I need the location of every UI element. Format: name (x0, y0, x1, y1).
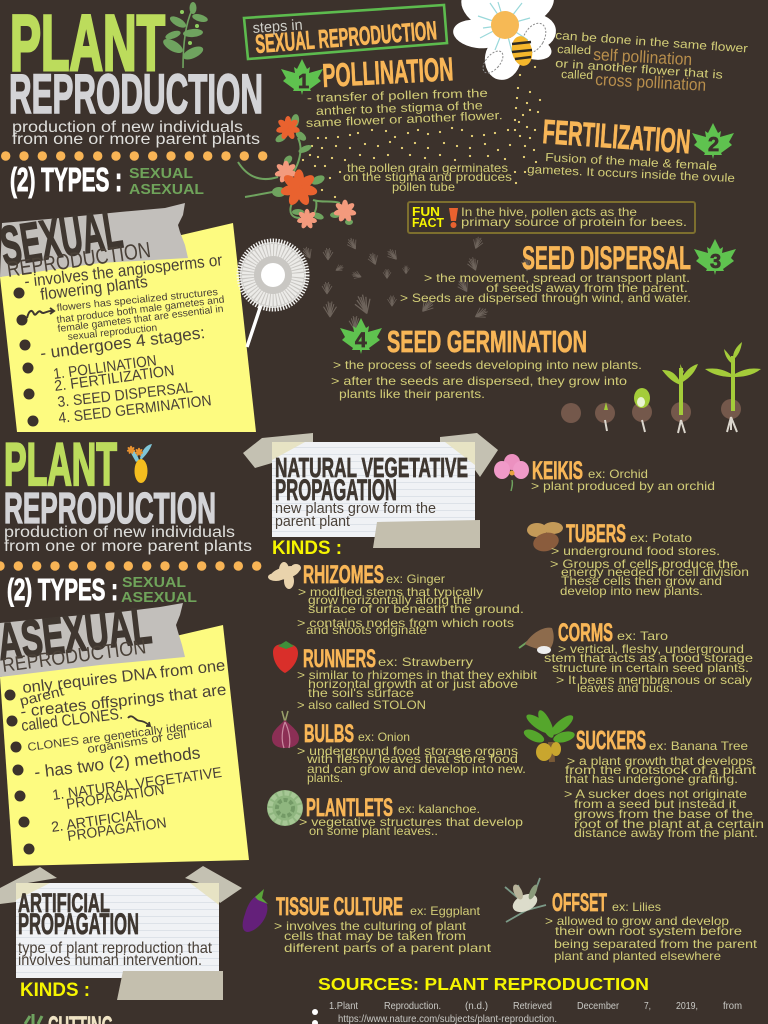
item: corms: CORMS (558, 619, 613, 647)
subtitle: definition: production of new individuals (12, 119, 243, 136)
icon: lemon with flowers (127, 444, 152, 483)
item: offset: ex: Lilies (612, 900, 661, 914)
note text: 3. SEED DISPERSAL (57, 379, 194, 411)
step 3: seed dispersal: > Seeds are dispersed through wind, and water. (400, 291, 691, 305)
item: corms: leaves and buds. (577, 681, 673, 695)
item: offset: > allowed to grow and develop (545, 914, 729, 928)
item: offset: plant and planted elsewhere (554, 949, 721, 963)
note text: CLONES are genetically identical (27, 718, 213, 754)
text: source citation (312, 1001, 742, 1024)
callout: fun fact: primary source of protein for bees. (461, 215, 687, 229)
note text (18, 657, 227, 845)
icon: onion (272, 711, 299, 748)
title: plant reproduction: REPRODUCTION (9, 62, 263, 125)
step 2: fertilization: gametes. It occurs inside the ovule (527, 162, 736, 185)
torn tape heading (0, 197, 188, 282)
step 1: pollination (281, 50, 503, 130)
note text: flowering plants (39, 273, 149, 304)
pollen trail (303, 67, 540, 197)
item: rhizomes: RHIZOMES (303, 561, 384, 589)
text: pollen tube (343, 161, 512, 194)
icon: daisy with bee (451, 0, 561, 83)
heading: sources: SOURCES: PLANT REPRODUCTION (318, 974, 649, 994)
icon: banana palm (522, 708, 576, 762)
icon: potatoes (527, 522, 563, 554)
item: runners: the soil's surface (308, 686, 415, 700)
item: rhizomes: surface of or beneath the ground. (308, 602, 524, 616)
item: tubers: These cells then grow and (561, 574, 722, 588)
icon: orchid (494, 454, 529, 491)
step 4: seed germination: plants like their parents. (339, 387, 485, 401)
dotted divider second (0, 561, 261, 571)
note holes (14, 288, 38, 426)
dotted divider top (1, 151, 267, 161)
item: tubers: develop into new plants. (560, 584, 703, 598)
item: tubers: TUBERS (566, 520, 626, 548)
item: corms: structure in certain seed plants. (552, 661, 749, 675)
text: source citation: (n.d.) (465, 1001, 488, 1012)
item: corms: > It bears membranous or scaly (556, 673, 752, 687)
item: bulbs: and can grow and develop into new. (307, 762, 526, 776)
item: suckers: > a plant growth that develops (567, 754, 753, 768)
icon: flower vine (238, 113, 357, 229)
item: rhizomes: grow horizontally along the (308, 593, 473, 607)
icon: ginger (268, 562, 301, 589)
card: artificial propagation: type of plant reproduction that (18, 940, 213, 957)
item: tubers: > Groups of cells produce the (550, 557, 739, 571)
text: source citation: December (577, 1001, 620, 1012)
text: self and cross pollination (555, 28, 748, 95)
step 4: seed germination: > after the seeds are dispersed, they grow into (331, 374, 628, 388)
heading: two types: SEXUAL (129, 165, 193, 182)
step 4: seed germination: SEED GERMINATION (387, 324, 587, 359)
subtitle: second definition: from one or more parent plants (4, 538, 252, 555)
title: second plant reproduction: REPRODUCTION (4, 484, 216, 533)
item: bulbs (272, 711, 526, 785)
text: self and cross pollination: self pollination (593, 45, 693, 69)
item: suckers: ex: Banana Tree (649, 739, 748, 753)
step 4: seed germination: > the process of seeds developing into new plants. (333, 358, 642, 372)
item: offset: OFFSET (552, 889, 607, 917)
text: source citation: Retrieved (513, 1001, 552, 1012)
icon: eggplant (243, 889, 268, 932)
item: runners (273, 641, 538, 712)
item: suckers: distance away from the plant. (574, 826, 758, 840)
item: runners: RUNNERS (303, 645, 376, 673)
item: plantlets: on some plant leaves.. (309, 824, 438, 838)
item: tubers: ex: Potato (630, 531, 693, 545)
note text: called CLONES. (20, 706, 124, 735)
text: pollen tube: on the stigma and produces (343, 170, 512, 184)
item: keikis: > plant produced by an orchid (531, 479, 715, 493)
subtitle: second definition: production of new individuals (4, 524, 235, 541)
text: source citation: from (723, 1001, 742, 1012)
note text: PROPAGATION (65, 782, 165, 813)
card: artificial propagation: ARTIFICIAL (18, 888, 110, 918)
panel: asexual reproduction note (0, 597, 249, 866)
text: self and cross pollination: can be done in the same flower (555, 28, 748, 55)
item: corms: stem that acts as a food storage (544, 651, 754, 665)
title: plant reproduction (9, 0, 263, 125)
icon: leaf 2: 2 (708, 134, 719, 156)
item: plantlets: ex: kalanchoe. (398, 802, 480, 816)
note text: - involves the angiosperms or (23, 251, 224, 291)
item: keikis (494, 454, 715, 493)
icon: leaf 4: 4 (355, 329, 367, 352)
item: tissue culture: cells that may be taken from (284, 929, 466, 943)
card: natural vegetative propagation: NATURAL VEGETATIVE (275, 452, 468, 483)
torn tape heading (0, 597, 185, 677)
note text: - has two (2) methods (33, 743, 201, 782)
subtitle: definition: from one or more parent plants (12, 131, 260, 148)
item: suckers: that has undergone grafting. (565, 772, 738, 786)
step 1: pollination: POLLINATION (321, 50, 454, 94)
item: suckers: root of the plant at a certain (574, 817, 764, 831)
item: tissue culture (243, 889, 492, 955)
torn tape heading: SEXUAL (0, 197, 126, 278)
note paper (0, 223, 256, 432)
note paper (0, 625, 249, 866)
item: tubers (527, 520, 749, 598)
text: pollen tube: the pollen grain germinates (347, 161, 508, 175)
note text: PROPAGATION (66, 815, 168, 845)
step 1: pollination: anther to the stigma of the (316, 98, 484, 118)
item: runners: > also called STOLON (297, 698, 426, 712)
torn tape heading: REPRODUCTION (5, 237, 152, 282)
card: natural vegetative propagation: PROPAGATION (275, 474, 397, 507)
note text: female gametes that are essential in (57, 304, 224, 335)
item: corms (519, 619, 754, 695)
note text: - undergoes 4 stages: (39, 323, 206, 363)
icon: leaf 1: 1 (298, 71, 309, 93)
note text: 4. SEED GERMINATION (57, 392, 212, 427)
note text: sexual reproduction (67, 323, 158, 343)
heading: two types: (2) TYPES : (10, 161, 122, 198)
text: self and cross pollination: called (561, 67, 593, 82)
card: artificial propagation: involves human intervention. (18, 952, 202, 969)
heading: second two types: (2) TYPES : (7, 572, 118, 607)
item: rhizomes: and shoots originate (306, 623, 427, 637)
icon: leaf 3: 3 (710, 251, 721, 273)
card: artificial propagation: PROPAGATION (18, 908, 139, 941)
title: second plant reproduction: PLANT (4, 431, 117, 498)
torn tape heading: REPRODUCTION (1, 636, 147, 677)
step 3: seed dispersal: > the movement, spread or transport plant. (424, 271, 690, 285)
item: offset: being separated from the parent (554, 937, 758, 951)
note text: 1. POLLINATION (52, 352, 158, 383)
dandelion seeds blowing (300, 236, 532, 330)
item: tissue culture: > involves the culturing of plant (274, 919, 467, 933)
item: offset (505, 878, 758, 963)
item: plantlets: PLANTLETS (306, 794, 393, 822)
step 3: seed dispersal (400, 239, 736, 305)
heading: kinds artificial: KINDS : (20, 980, 90, 1001)
title: plant reproduction: PLANT (10, 0, 165, 87)
item: rhizomes (268, 561, 524, 637)
item: suckers (522, 708, 764, 840)
item: rhizomes: > contains nodes from which roots (297, 616, 514, 630)
text: self and cross pollination: called (557, 42, 591, 57)
item: runners: ex: Strawberry (378, 655, 473, 669)
text: self and cross pollination: or in another flower that is (555, 56, 723, 82)
item: suckers: SUCKERS (576, 725, 646, 755)
text: source citation: Reproduction. (384, 1001, 441, 1012)
item: suckers: > A sucker does not originate (564, 787, 748, 801)
note text: that produce both male gametes and (56, 294, 225, 326)
note text: flowers has specialized structures (56, 287, 218, 314)
note text: organisms or cell (87, 728, 187, 756)
item: runners: > similar to rhizomes in that they exhibit (297, 668, 538, 682)
text: source citation: 7, (644, 1001, 651, 1012)
item: tissue culture: TISSUE CULTURE (276, 893, 403, 921)
item: suckers: from the rootstock of a plant (565, 763, 757, 777)
item: tissue culture: different parts of a parent plant (284, 941, 492, 955)
item: rhizomes: ex: Ginger (386, 572, 445, 586)
text: source citation: 2019, (676, 1001, 698, 1012)
step 4: seed germination (331, 318, 642, 401)
item: tissue culture: ex: Eggplant (410, 904, 481, 918)
icon: taro (519, 628, 554, 654)
illustration: sprouting stages (561, 342, 761, 433)
card: natural vegetative propagation (243, 433, 498, 548)
heading: second two types: ASEXUAL (121, 589, 197, 606)
text: self and cross pollination: cross pollination (595, 70, 707, 95)
icon: leaf 2 (692, 123, 734, 159)
card: natural vegetative propagation: new plants grow form the (275, 500, 436, 517)
text: source citation: 1.Plant (329, 1001, 358, 1012)
badge: steps in sexual reproduction: steps in (252, 17, 303, 37)
subtitle: definition (12, 119, 260, 148)
subtitle: second definition (4, 524, 252, 555)
item: tubers: energy needed for cell division (561, 565, 749, 579)
card: natural vegetative propagation: parent plant (275, 513, 351, 530)
item: bulbs: ex: Onion (358, 730, 410, 744)
note text: parent (18, 682, 66, 709)
icon: green sprig (161, 2, 209, 68)
icon: leaf 3 (694, 239, 736, 275)
panel: sexual reproduction note (0, 197, 256, 432)
note text: 1. NATURAL VEGETATIVE (51, 765, 223, 804)
note text (23, 251, 225, 427)
icon: strawberry (273, 641, 298, 673)
item: bulbs: plants. (307, 771, 343, 785)
item: offset: their own root system before (555, 924, 743, 938)
icon: dandelion (239, 241, 307, 347)
step 2: fertilization (527, 113, 736, 185)
heading: two types: ASEXUAL (129, 181, 204, 198)
note text: only requires DNA from one (22, 657, 226, 697)
note holes (4, 690, 34, 854)
text: pollen tube: pollen tube (392, 180, 455, 194)
icon: lilies (505, 878, 546, 922)
item: keikis: KEIKIS (532, 457, 583, 485)
note text: 2. ARTIFICIAL (50, 807, 144, 836)
item: rhizomes: > modified stems that typically (298, 585, 483, 599)
note text: 2. FERTILIZATION (53, 362, 175, 395)
torn tape heading: ASEXUAL (0, 597, 154, 672)
item: tubers: > underground food stores. (551, 544, 720, 558)
callout: fun fact (408, 202, 695, 233)
note text: - creates offsprings that are (20, 682, 227, 721)
item: corms: > vertical, fleshy, underground (558, 642, 744, 656)
item: bulbs: with fleshy leaves that store food (306, 752, 518, 766)
callout: fun fact: FACT (412, 216, 444, 230)
step 2: fertilization: Fusion of the male & female (545, 150, 718, 173)
icon: leaf 4 (340, 318, 382, 354)
item: cutting (25, 1012, 113, 1024)
item: keikis: ex: Orchid (588, 467, 648, 481)
card: artificial propagation (0, 866, 242, 1000)
title: second plant reproduction (4, 431, 216, 533)
step 1: pollination: - transfer of pollen from the (307, 86, 489, 105)
item: runners: horizontal growth at or just above (308, 677, 519, 691)
icon: leaf 1 (281, 59, 323, 95)
step 3: seed dispersal: of seeds away from the parent. (486, 281, 688, 295)
item: suckers: grows from the base of the (574, 807, 754, 821)
step 1: pollination: same flower or another flower. (306, 108, 503, 130)
heading: kinds natural: KINDS : (272, 538, 342, 559)
item: bulbs: > underground food storage organs (297, 744, 518, 758)
item: plantlets (267, 790, 524, 838)
badge: steps in sexual reproduction (244, 5, 447, 59)
callout: fun fact: In the hive, pollen acts as the (461, 205, 637, 219)
item: corms: ex: Taro (617, 629, 669, 643)
item: bulbs: BULBS (304, 720, 354, 748)
heading: second two types: SEXUAL (122, 574, 186, 591)
badge: steps in sexual reproduction: SEXUAL REPRODUCTION (254, 15, 438, 59)
callout: fun fact: FUN (412, 205, 440, 219)
item: plantlets: > vegetative structures that develop (299, 815, 524, 829)
icon: succulent (267, 790, 303, 826)
item: suckers: from a seed but instead it (574, 797, 737, 811)
